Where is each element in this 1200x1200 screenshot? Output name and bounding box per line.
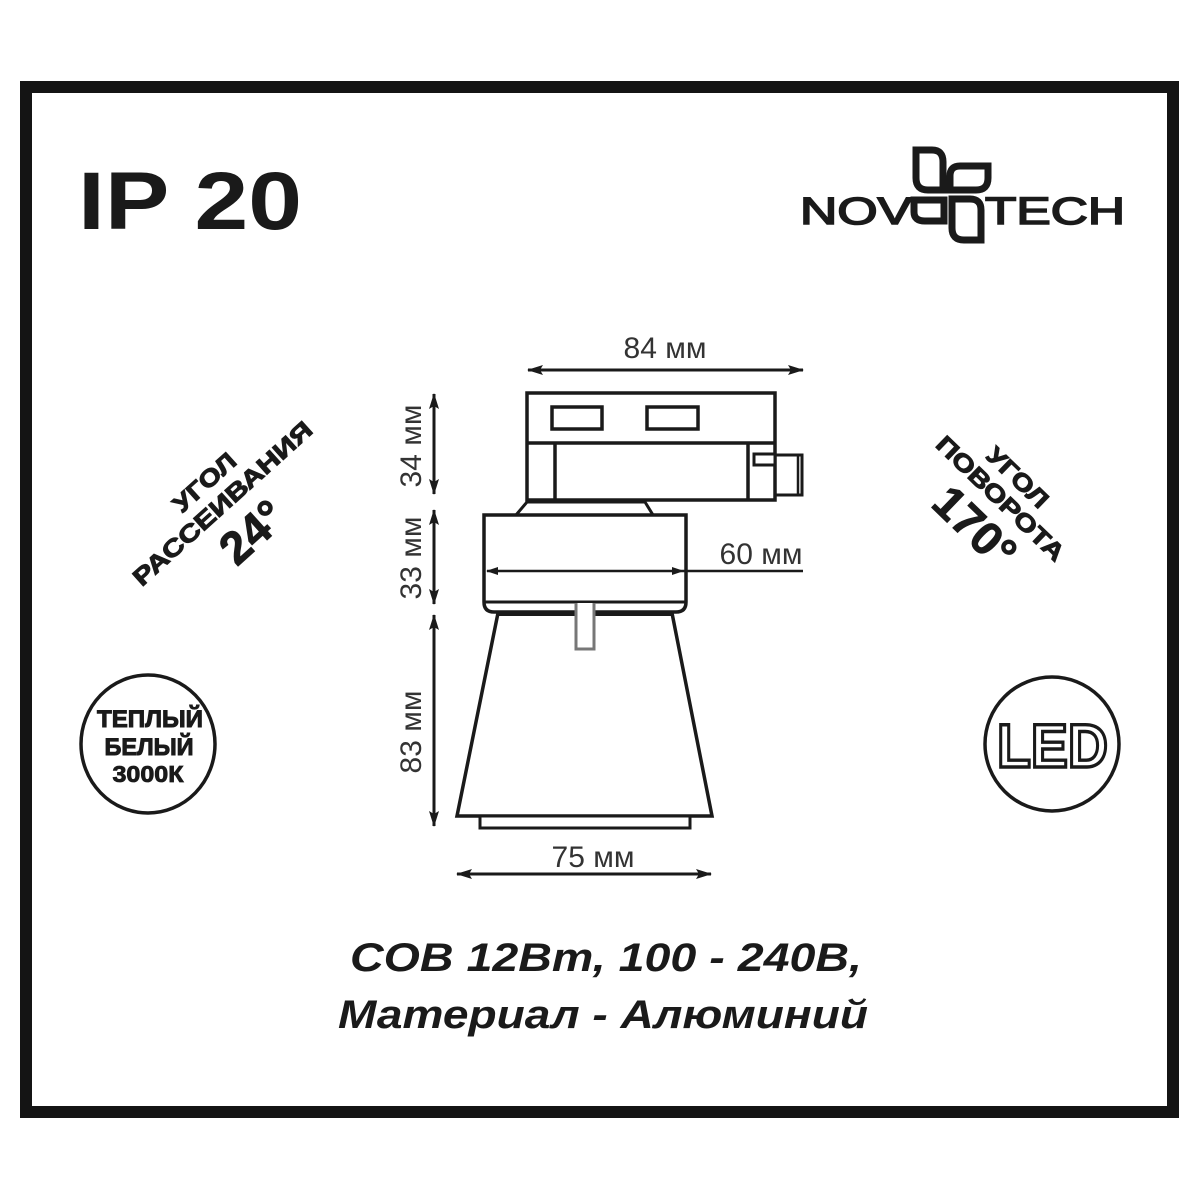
83 mm label: 83 мм <box>395 691 428 773</box>
label: angle word: УГОЛ <box>980 442 1054 514</box>
badge circle <box>81 675 215 813</box>
badge text line 1: ТЕПЛЫЙ <box>97 705 203 733</box>
logo: Novotech <box>800 150 1125 240</box>
shade collar band <box>498 611 672 616</box>
dimension: 33 mm <box>395 510 434 604</box>
75 mm arrow <box>457 872 711 876</box>
83 mm arrow <box>432 615 436 826</box>
callout: beam angle <box>128 416 318 592</box>
badge: LED <box>985 677 1119 811</box>
badge: warm white 3000K <box>81 675 215 813</box>
logo petals <box>914 150 988 240</box>
bottom ring <box>480 816 690 828</box>
60 mm arrow <box>487 570 683 572</box>
specification text <box>338 936 868 1037</box>
84 mm arrow <box>528 368 803 372</box>
75 mm label: 75 мм <box>552 841 634 874</box>
badge text line 3: 3000К <box>112 761 185 787</box>
track adapter body <box>527 393 775 500</box>
product drawing: track spotlight <box>457 393 802 828</box>
LED outlined text: LED <box>997 712 1108 780</box>
label: angle word: УГОЛ <box>168 448 242 518</box>
34 mm arrow <box>432 394 436 494</box>
lamp head cylinder <box>484 515 686 612</box>
logo wordmark right: TECH <box>985 191 1125 233</box>
60 mm label: 60 мм <box>720 538 802 571</box>
label: rotation word: ПОВОРОТА <box>930 431 1070 567</box>
callout: rotation angle <box>923 431 1070 579</box>
badge text line 2: БЕЛЫЙ <box>104 733 194 761</box>
heading: IP rating: IP 20 <box>78 156 302 247</box>
84 mm label: 84 мм <box>624 332 706 365</box>
60 mm leader <box>683 570 803 572</box>
value: 24 degrees: 24° <box>209 489 295 575</box>
dimension: 34 mm <box>395 394 434 494</box>
conical shade <box>457 613 712 816</box>
33 mm arrow <box>432 510 436 604</box>
slot in shade <box>576 603 594 649</box>
label: dispersion word: РАССЕИВАНИЯ <box>128 416 318 592</box>
spec line 1: COB 12Вт, 100 - 240В, <box>350 936 862 980</box>
track adapter knob <box>775 455 802 495</box>
value: 170 degrees: 170° <box>923 475 1027 579</box>
34 mm label: 34 мм <box>395 405 428 487</box>
neck connector <box>516 502 653 515</box>
LED circle <box>985 677 1119 811</box>
33 mm label: 33 мм <box>395 517 428 599</box>
logo wordmark left: NOV <box>800 191 913 233</box>
spec line 2: Материал - Алюминий <box>338 993 868 1037</box>
